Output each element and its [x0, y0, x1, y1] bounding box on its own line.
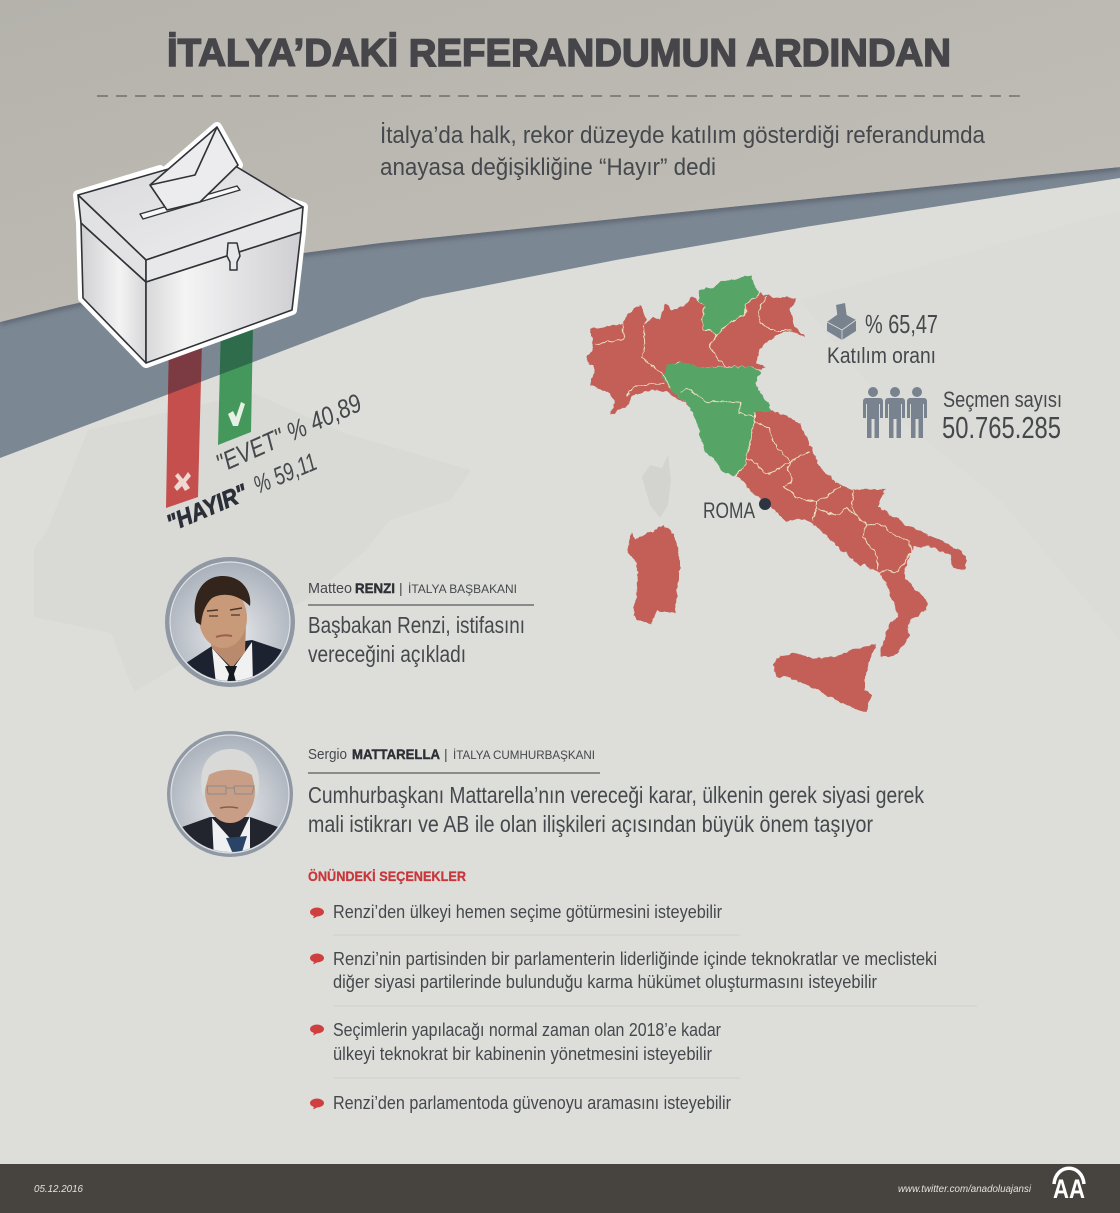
bar: evet [218, 325, 253, 445]
Renzi name line: Matteo [308, 580, 352, 597]
regional borders [595, 293, 912, 572]
options list [310, 902, 977, 1113]
icon: cross [174, 472, 191, 491]
voters label: Seçmen sayısı [943, 387, 1062, 412]
Renzi name line: | [399, 580, 403, 596]
Mattarella statement: Cumhurbaşkanı Mattarella’nın vereceği karar, ülkenin gerek siyasi gerek [308, 782, 924, 808]
option 2: diğer siyasi partilerinde bulunduğu karma hükümet oluşturmasını isteyebilir [333, 972, 877, 992]
region: north-east [709, 293, 805, 370]
region: trentino [699, 276, 759, 336]
voters value: 50.765.285 [942, 410, 1061, 445]
box lid front side [146, 207, 303, 282]
region: sicily [772, 643, 877, 713]
box body left face [81, 223, 146, 363]
region: centre and south [737, 410, 967, 657]
Renzi statement: vereceğini açıkladı [308, 641, 466, 667]
icon: check [228, 402, 245, 426]
Mattarella divider [308, 772, 600, 774]
option 4: Renzi’den parlamentoda güvenoyu aramasını isteyebilir [333, 1093, 731, 1113]
icon: three voters [863, 387, 927, 438]
blue-grey diagonal band [0, 167, 1120, 458]
footer bar [0, 1164, 1120, 1213]
box clasp [227, 243, 240, 270]
roma label: ROMA [703, 498, 755, 523]
label: hayir percent: % 59,11 [249, 448, 321, 500]
Mattarella name line: | [444, 746, 448, 762]
portrait: Renzi [165, 557, 295, 690]
bar shadows over band [168, 330, 253, 394]
Renzi name line: RENZI [355, 580, 395, 596]
label: hayir: "HAYIR" [163, 479, 252, 538]
Renzi name line: İTALYA BAŞBAKANI [408, 582, 517, 596]
intro text: anayasa değişikliğine “Hayır” dedi [380, 154, 716, 181]
option 1: Renzi’den ülkeyi hemen seçime götürmesini isteyebilir [333, 902, 722, 922]
region: north-west [585, 297, 727, 415]
intro text [380, 122, 986, 181]
Renzi statement: Başbakan Renzi, istifasını [308, 612, 525, 638]
Renzi divider [308, 604, 534, 606]
Mattarella statement: mali istikrarı ve AB ile olan ilişkileri açısından büyük önem taşıyor [308, 811, 873, 837]
option 3: ülkeyi teknokrat bir kabinenin yönetmesini isteyebilir [333, 1044, 712, 1064]
box lid left side [78, 195, 146, 282]
intro text: İtalya’da halk, rekor düzeyde katılım gösterdiği referandumda [380, 122, 986, 149]
box body right face [146, 232, 301, 363]
roma marker [759, 498, 771, 510]
Mattarella name line: İTALYA CUMHURBAŞKANI [453, 748, 595, 762]
Renzi name line [308, 580, 517, 597]
options heading: ÖNÜNDEKİ SEÇENEKLER [308, 868, 466, 884]
title divider [97, 95, 1023, 97]
Mattarella name line [308, 746, 595, 763]
icon: small ballot box [827, 303, 856, 340]
ballot box [78, 127, 303, 363]
result bars [166, 325, 253, 508]
Renzi statement [308, 612, 525, 667]
option 3: Seçimlerin yapılacağı normal zaman olan 2018’e kadar [333, 1020, 721, 1040]
logo: Anadolu Agency: AA [1053, 1174, 1085, 1204]
ballot slot [140, 186, 240, 219]
top grey panel [0, 0, 1120, 322]
Mattarella name line: MATTARELLA [352, 746, 440, 762]
bar: hayir [166, 340, 202, 508]
footer url: www.twitter.com/anadoluajansi [898, 1183, 1032, 1195]
title: İTALYA’DAKİ REFERANDUMUN ARDINDAN [167, 32, 951, 75]
Mattarella statement [308, 782, 924, 837]
box lid top [78, 155, 303, 260]
turnout label: Katılım oranı [827, 343, 936, 368]
region: sardinia [628, 525, 680, 623]
footer date: 05.12.2016 [34, 1183, 83, 1195]
option 2: Renzi’nin partisinden bir parlamenterin liderliğinde içinde teknokratlar ve meclisteki [333, 949, 937, 969]
envelope flap [150, 127, 217, 185]
band shadow [0, 167, 1120, 322]
label: evet: "EVET" % 40,89 [211, 388, 366, 478]
Mattarella name line: Sergio [308, 746, 347, 763]
portrait: Mattarella [167, 731, 293, 862]
option 3 [310, 1020, 721, 1064]
envelope [150, 127, 238, 210]
region: emilia and toscana [663, 362, 772, 475]
box white outline [78, 127, 303, 363]
background map: faint land shapes [34, 210, 1120, 692]
map of Italy [585, 276, 967, 713]
option 2 [310, 949, 937, 992]
turnout value: % 65,47 [865, 309, 938, 339]
